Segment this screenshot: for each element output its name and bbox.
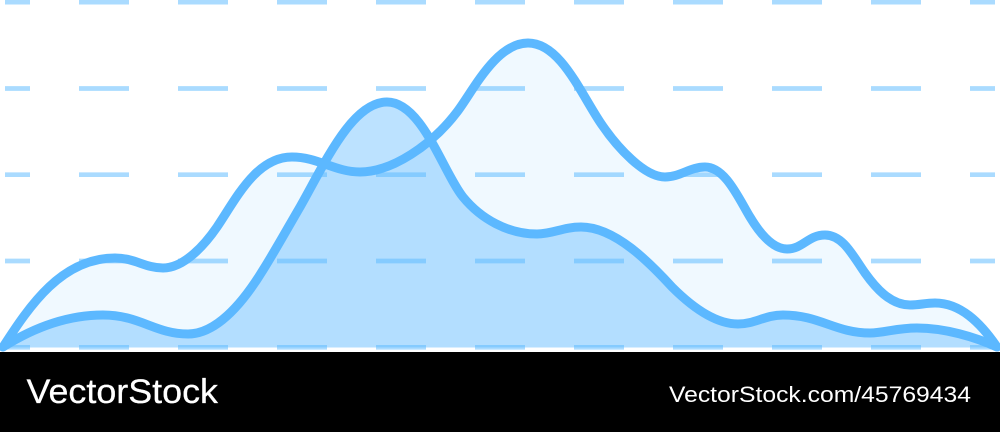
line: front series — [3, 102, 997, 347]
line: back series — [3, 43, 997, 347]
image id url: VectorStock.com/45769434 — [669, 382, 971, 407]
area chart: back series — [3, 43, 997, 348]
logo wordmark: VectorStock — [26, 373, 219, 411]
footer bar — [0, 352, 1000, 432]
area chart: front series — [3, 102, 997, 348]
